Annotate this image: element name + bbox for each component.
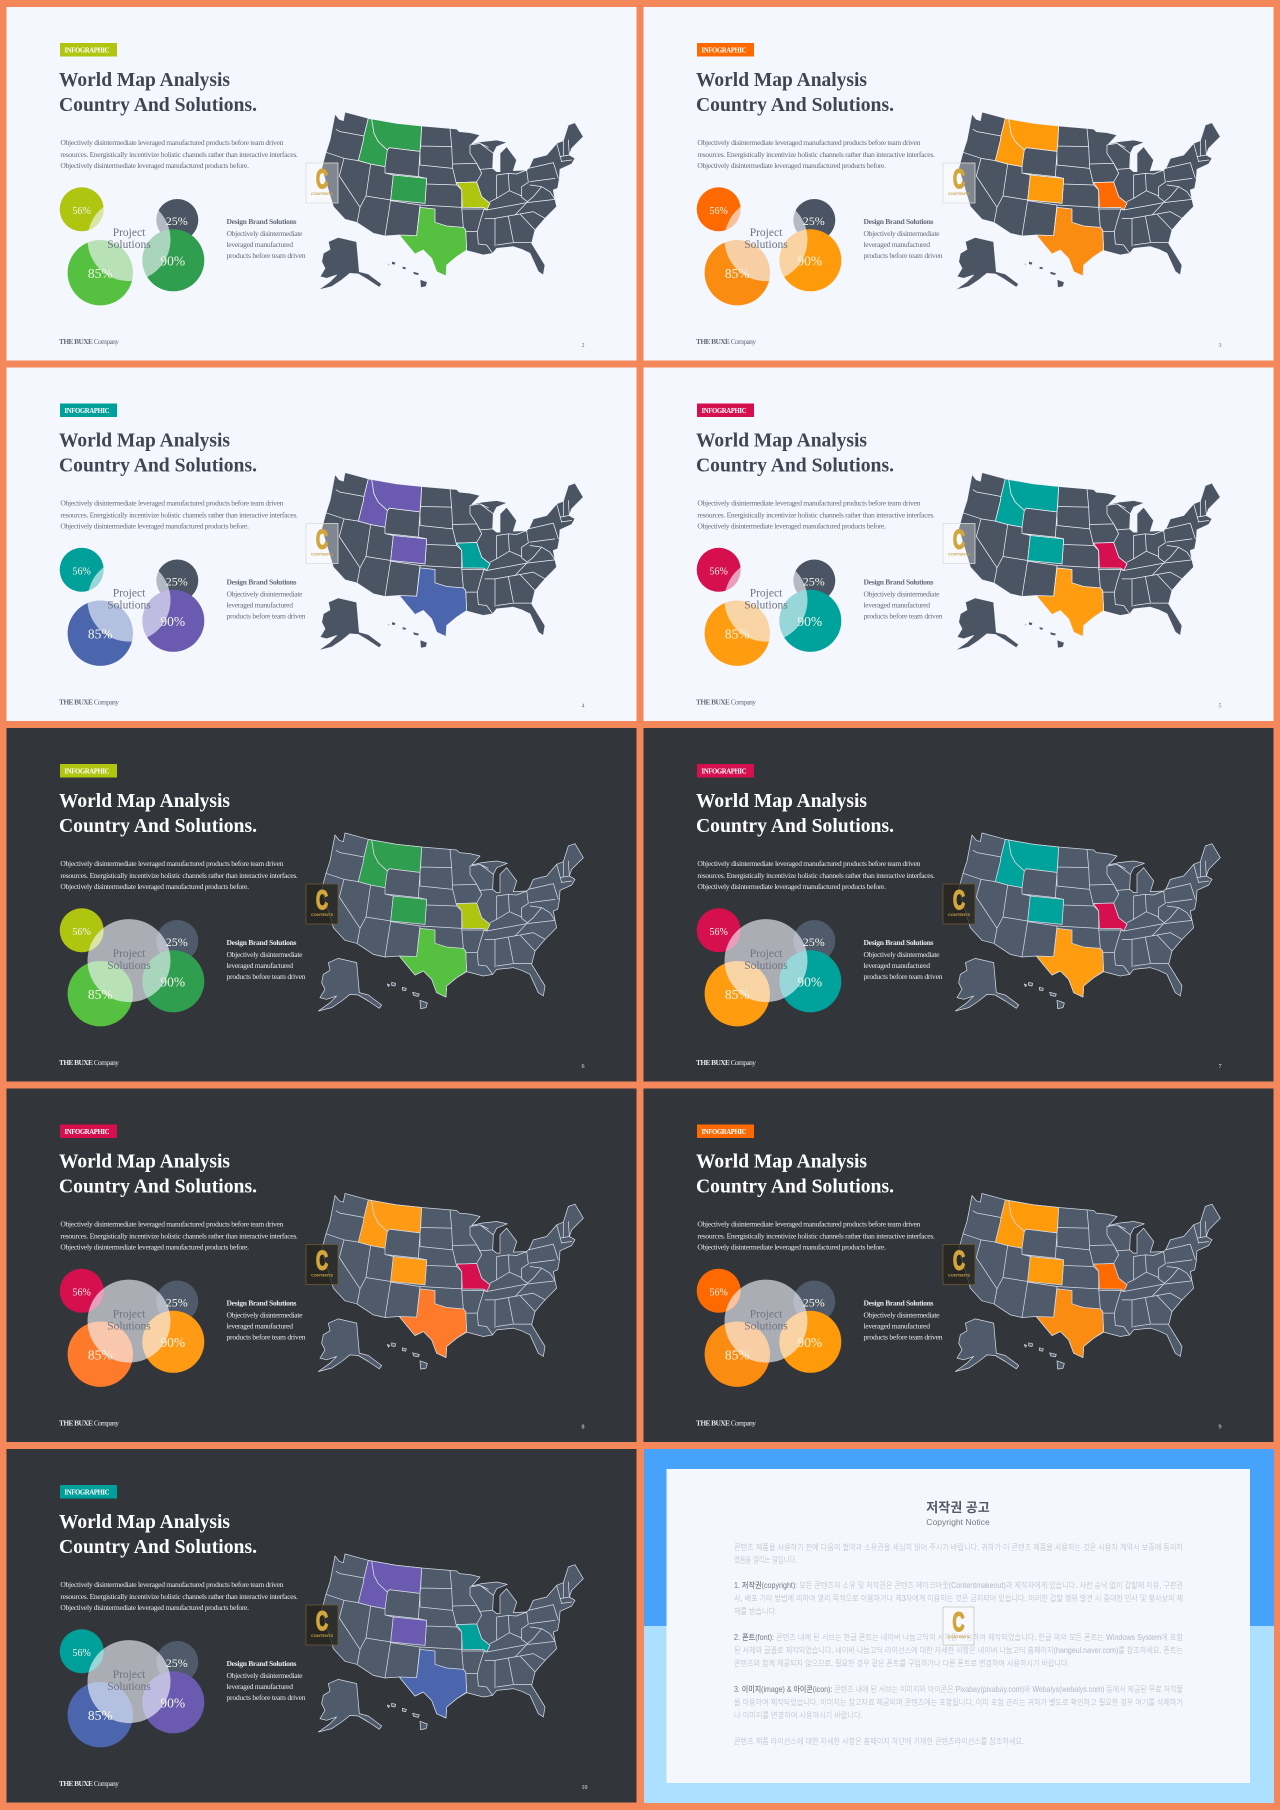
body text: [697, 138, 935, 170]
bubble chart: Solutions: [744, 600, 788, 612]
notice body: [734, 1542, 1183, 1746]
body text: resources. Energistically incentivize holistic channels rather than interactive interfaces.: [60, 150, 298, 159]
side note: [864, 938, 943, 981]
bubble chart: Solutions: [107, 1681, 151, 1693]
bubble chart: 25%: [166, 574, 188, 588]
body text: Objectively disintermediate leveraged manufactured products before team driven: [697, 498, 921, 508]
body text: [697, 498, 935, 530]
bubble chart: 90%: [160, 614, 185, 629]
panel: slide 2, light green: [6, 7, 636, 360]
side note: [226, 217, 306, 260]
US map: [318, 472, 583, 650]
badge: INFOGRAPHIC: [64, 48, 110, 54]
logo: CONTENTS: [311, 1633, 333, 1638]
side note: Objectively disintermediate: [864, 950, 940, 959]
footer: [696, 1058, 1222, 1070]
bubble chart: 90%: [797, 1335, 822, 1350]
body text: Objectively disintermediate leveraged manufactured products before.: [697, 522, 886, 530]
footer: 7: [1218, 1064, 1222, 1070]
side note: Objectively disintermediate: [864, 1310, 940, 1320]
footer: [696, 698, 1222, 710]
footer: THE BUXE Company: [696, 1058, 756, 1067]
body text: Objectively disintermediate leveraged manufactured products before.: [697, 1242, 886, 1252]
body text: Objectively disintermediate leveraged manufactured products before team driven: [60, 138, 284, 147]
body text: Objectively disintermediate leveraged manufactured products before team driven: [60, 859, 284, 868]
footer: [59, 1058, 584, 1070]
title: World Map Analysis: [696, 790, 867, 812]
title: Country And Solutions.: [59, 815, 257, 837]
bubble chart: 90%: [797, 974, 822, 990]
bubble chart: 85%: [725, 987, 750, 1002]
side note: leveraged manufactured: [226, 1682, 293, 1691]
logo: C: [953, 1246, 965, 1276]
notice body: 을 이용하여 제작되었습니다. 이미지는 참고자료 제공되며 콘텐츠에는 포함됩니다. 이미 포함 관리는 귀하가 별도로 확인하고 필요한 경우 여기를 삭제하거: [734, 1697, 1183, 1707]
body text: Objectively disintermediate leveraged manufactured products before.: [60, 882, 249, 891]
badge: INFOGRAPHIC: [64, 1490, 110, 1496]
bubble chart: 25%: [803, 1296, 825, 1310]
side note: Objectively disintermediate: [226, 1671, 303, 1680]
notice heading: [926, 1500, 990, 1527]
title: [696, 790, 894, 837]
US map: [955, 833, 1220, 1011]
logo: CONTENTS: [948, 552, 970, 556]
side note: [226, 938, 306, 981]
title: World Map Analysis: [59, 790, 230, 812]
title: World Map Analysis: [696, 69, 867, 91]
bubble chart: 56%: [710, 1288, 728, 1298]
bubble chart: Project: [750, 948, 783, 960]
side note: products before team driven: [226, 972, 306, 981]
badge: [60, 1124, 117, 1138]
side note: Design Brand Solutions: [864, 1298, 934, 1308]
bubble chart: Solutions: [107, 600, 151, 612]
logo: CONTENTS: [948, 912, 970, 917]
body text: resources. Energistically incentivize holistic channels rather than interactive interfaces.: [60, 510, 298, 520]
bubble chart: 56%: [710, 206, 728, 217]
side note: products before team driven: [864, 1332, 943, 1342]
notice body: 였음을 알리는 말입니다.: [734, 1556, 797, 1564]
footer: THE BUXE Company: [59, 1418, 119, 1428]
logo: C: [953, 885, 965, 915]
title: World Map Analysis: [696, 1150, 867, 1172]
notice body: 나 이미지를 변경하여 사용하시기 바랍니다.: [734, 1710, 863, 1720]
logo: [943, 524, 975, 564]
bubble chart: 85%: [725, 1348, 750, 1362]
panel: slide 4, light purple: [6, 368, 636, 721]
body text: resources. Energistically incentivize holistic channels rather than interactive interfaces.: [697, 150, 935, 159]
side note: Objectively disintermediate: [226, 1310, 303, 1320]
US map: [318, 1193, 583, 1371]
badge: INFOGRAPHIC: [64, 1129, 110, 1136]
title: Country And Solutions.: [696, 94, 894, 116]
side note: Design Brand Solutions: [864, 578, 934, 586]
footer: 9: [1218, 1424, 1222, 1430]
side note: Design Brand Solutions: [226, 938, 297, 947]
body text: resources. Energistically incentivize holistic channels rather than interactive interfaces.: [60, 871, 298, 880]
bubble chart: [697, 187, 841, 305]
side note: Design Brand Solutions: [226, 1298, 297, 1308]
US map: [318, 833, 583, 1011]
body text: [60, 498, 298, 530]
panel: slide 3, light orange: [644, 7, 1274, 360]
logo: CONTENTS: [948, 191, 970, 196]
title: World Map Analysis: [59, 430, 230, 452]
logo: [306, 1244, 338, 1284]
logo: [306, 163, 338, 203]
logo: C: [953, 164, 965, 194]
badge: [60, 764, 117, 778]
logo: [943, 1244, 975, 1284]
bubble chart: [697, 908, 841, 1026]
side note: [226, 1659, 306, 1702]
side note: products before team driven: [226, 1332, 306, 1342]
body text: [697, 1220, 935, 1252]
side note: [864, 1298, 943, 1342]
footer: 4: [582, 704, 584, 710]
badge: [697, 43, 754, 56]
bubble chart: 56%: [73, 1288, 91, 1298]
body text: Objectively disintermediate leveraged manufactured products before.: [60, 1603, 249, 1612]
badge: [60, 404, 117, 417]
footer: THE BUXE Company: [59, 1779, 119, 1788]
logo: [943, 1607, 974, 1645]
US map: [955, 1193, 1220, 1371]
notice body: 2. 폰트(font): 콘텐츠 내에 된 서브는 한글 폰트는 네이버 나눔고딕의 서체를 사용하여 제작되었습니다. 한글 외의 모든 폰트는 Windows System에 포함: [734, 1632, 1183, 1642]
side note: [864, 578, 943, 620]
side note: [226, 578, 306, 620]
bubble chart: [60, 908, 204, 1026]
bubble chart: 25%: [803, 214, 825, 228]
bubble chart: Project: [113, 1308, 146, 1320]
footer: 5: [1218, 704, 1222, 710]
badge: INFOGRAPHIC: [702, 768, 747, 776]
body text: Objectively disintermediate leveraged manufactured products before team driven: [60, 1580, 284, 1589]
body text: resources. Energistically incentivize holistic channels rather than interactive interfaces.: [697, 1232, 935, 1240]
title: [696, 430, 894, 476]
badge: INFOGRAPHIC: [702, 1129, 747, 1136]
badge: INFOGRAPHIC: [702, 408, 747, 415]
US map: [318, 112, 583, 290]
footer: 10: [582, 1785, 588, 1791]
bubble chart: 85%: [88, 626, 113, 642]
body text: Objectively disintermediate leveraged manufactured products before.: [697, 161, 886, 170]
title: [59, 790, 257, 837]
footer: [696, 337, 1222, 349]
panel: slide 5, light teal and crimson: [644, 368, 1274, 721]
side note: Objectively disintermediate: [226, 590, 303, 598]
logo: CONTENTS: [948, 1272, 970, 1278]
badge: [60, 43, 117, 56]
bubble chart: Solutions: [744, 960, 788, 972]
bubble chart: 85%: [88, 266, 113, 281]
logo: C: [316, 524, 328, 554]
footer: 3: [1218, 343, 1222, 349]
footer: THE BUXE Company: [696, 337, 756, 346]
body text: Objectively disintermediate leveraged manufactured products before.: [697, 882, 886, 891]
body text: resources. Energistically incentivize holistic channels rather than interactive interfaces.: [60, 1232, 298, 1240]
body text: Objectively disintermediate leveraged manufactured products before team driven: [697, 1220, 921, 1228]
bubble chart: [60, 187, 204, 305]
title: Country And Solutions.: [59, 454, 257, 476]
body text: [697, 859, 935, 891]
title: World Map Analysis: [59, 1511, 230, 1533]
side note: products before team driven: [226, 251, 306, 260]
logo: [306, 884, 338, 924]
bubble chart: 56%: [73, 206, 91, 217]
badge: [60, 1485, 117, 1498]
logo: CONTENTS: [311, 1272, 333, 1278]
bubble chart: 90%: [797, 254, 822, 268]
bubble chart: Project: [113, 948, 146, 960]
side note: Objectively disintermediate: [226, 950, 303, 959]
title: [59, 430, 257, 476]
bubble chart: 56%: [710, 566, 728, 578]
badge: [697, 1124, 754, 1138]
side note: Design Brand Solutions: [226, 1659, 297, 1668]
side note: Design Brand Solutions: [864, 938, 934, 947]
title: [696, 69, 894, 116]
notice body: 콘텐츠 제품을 사용하기 전에 다음의 협약과 소유권을 세심히 읽어 주시기 바랍니다. 귀하가 이 콘텐츠 제품을 사용하는 것은 사용자 계약서 보증에 동의하: [734, 1542, 1183, 1552]
footer: 6: [582, 1064, 584, 1070]
notice body: 사, 배포 기타 방법에 의하여 영리 목적으로 이용하거나 제3자에게 이용하는 것은 금지되어 있습니다. 이러한 갑할 행위 발견 시 중대한 민사 및 형사상의 제: [734, 1593, 1183, 1603]
side note: leveraged manufactured: [864, 1322, 930, 1330]
body text: Objectively disintermediate leveraged manufactured products before team driven: [60, 1220, 284, 1228]
title: Country And Solutions.: [696, 1176, 894, 1198]
bubble chart: Solutions: [107, 960, 151, 972]
title: [59, 69, 257, 116]
footer: [696, 1418, 1222, 1430]
bubble chart: 56%: [73, 566, 91, 578]
logo: [943, 163, 975, 203]
bubble chart: [60, 548, 204, 666]
side note: products before team driven: [864, 612, 943, 620]
bubble chart: Project: [750, 227, 783, 239]
badge: INFOGRAPHIC: [702, 48, 747, 54]
side note: [226, 1298, 306, 1342]
bubble chart: 90%: [160, 254, 185, 268]
side note: leveraged manufactured: [226, 1322, 293, 1330]
title: World Map Analysis: [59, 1150, 230, 1172]
bubble chart: 25%: [166, 1656, 188, 1670]
logo: C: [953, 524, 965, 554]
side note: [864, 217, 943, 260]
footer: THE BUXE Company: [696, 1418, 756, 1428]
panel: slide 8, dark crimson and orange: [6, 1088, 636, 1442]
side note: leveraged manufactured: [864, 961, 930, 970]
panel: slide 10, dark purple: [6, 1449, 636, 1802]
bubble chart: 85%: [725, 266, 750, 281]
bubble chart: Solutions: [107, 239, 151, 251]
logo: C: [316, 1246, 328, 1276]
bubble chart: 90%: [797, 614, 822, 629]
side note: Design Brand Solutions: [226, 578, 297, 586]
logo: CONTENTS: [948, 1634, 970, 1639]
bubble chart: 85%: [88, 987, 113, 1002]
body text: [60, 1220, 298, 1252]
bubble chart: [60, 1629, 204, 1747]
side note: leveraged manufactured: [226, 961, 293, 970]
bubble chart: Project: [113, 1669, 146, 1681]
footer: THE BUXE Company: [59, 337, 119, 346]
panel: slide 7, dark teal and crimson: [644, 728, 1274, 1082]
side note: Design Brand Solutions: [864, 217, 934, 226]
bubble chart: 56%: [73, 927, 91, 938]
logo: C: [316, 1606, 328, 1636]
US map: [318, 1554, 583, 1732]
notice body: 콘텐츠와 함께 제공되지 않으므로, 필요한 경우 같은 폰트를 구입하거나 다른 폰트로 변경하여 사용하시기 바랍니다.: [734, 1658, 1070, 1668]
panel: copyright notice: [644, 1449, 1274, 1803]
US map: [955, 472, 1220, 650]
logo: [306, 1605, 338, 1645]
bubble chart: 56%: [710, 927, 728, 938]
title: Country And Solutions.: [59, 94, 257, 116]
bubble chart: 85%: [88, 1348, 113, 1362]
bubble chart: 25%: [166, 214, 188, 228]
title: World Map Analysis: [59, 69, 230, 91]
logo: [306, 524, 338, 564]
US map: [955, 112, 1220, 290]
badge: [697, 404, 754, 417]
badge: [697, 764, 754, 778]
side note: leveraged manufactured: [864, 600, 930, 610]
body text: [60, 138, 298, 170]
side note: products before team driven: [226, 612, 306, 620]
footer: 8: [582, 1424, 584, 1430]
title: [59, 1150, 257, 1198]
body text: Objectively disintermediate leveraged manufactured products before team driven: [697, 138, 921, 147]
body text: resources. Energistically incentivize holistic channels rather than interactive interfaces.: [60, 1592, 298, 1601]
notice body: 된 서체와 글꼴로 제작되었습니다. 네이버 나눔고딕 라이선스에 대한 자세한 사항은 네이버 나눔고딕 홈페이지(hangeul.naver.com)를 참조하세요. 폰트는: [734, 1645, 1183, 1655]
footer: [59, 1779, 588, 1791]
title: [696, 1150, 894, 1198]
title: World Map Analysis: [696, 430, 867, 452]
body text: resources. Energistically incentivize holistic channels rather than interactive interfaces.: [697, 871, 935, 880]
side note: leveraged manufactured: [864, 240, 930, 249]
logo: CONTENTS: [311, 912, 333, 917]
title: Country And Solutions.: [59, 1176, 257, 1198]
footer: THE BUXE Company: [696, 698, 756, 706]
logo: CONTENTS: [311, 191, 333, 196]
body text: Objectively disintermediate leveraged manufactured products before team driven: [60, 498, 284, 508]
body text: Objectively disintermediate leveraged manufactured products before team driven: [697, 859, 921, 868]
panel: slide 9, dark orange: [644, 1088, 1274, 1442]
side note: Objectively disintermediate: [864, 229, 940, 238]
bubble chart: Solutions: [744, 239, 788, 251]
side note: leveraged manufactured: [226, 600, 293, 610]
side note: Design Brand Solutions: [226, 217, 297, 226]
footer: [59, 337, 584, 349]
logo: CONTENTS: [311, 552, 333, 556]
notice body: 콘텐츠 제품 라이선스에 대한 자세한 사항은 홈페이지 하단에 기재한 콘텐츠라이선스를 참조하세요.: [734, 1736, 1024, 1746]
footer: [59, 1418, 584, 1430]
body text: [60, 1580, 298, 1612]
bubble chart: [697, 1269, 841, 1387]
footer: THE BUXE Company: [59, 698, 119, 706]
body text: [60, 859, 298, 891]
side note: products before team driven: [864, 251, 943, 260]
side note: Objectively disintermediate: [226, 229, 303, 238]
footer: THE BUXE Company: [59, 1058, 119, 1067]
title: Country And Solutions.: [696, 815, 894, 837]
title: Country And Solutions.: [696, 454, 894, 476]
badge: INFOGRAPHIC: [64, 768, 110, 776]
bubble chart: 56%: [73, 1648, 91, 1659]
side note: products before team driven: [864, 972, 943, 981]
logo: [943, 884, 975, 924]
bubble chart: 85%: [88, 1708, 113, 1723]
bubble chart: 85%: [725, 626, 750, 642]
notice heading: 저작권 공고: [926, 1500, 990, 1515]
panel: slide 6, dark green: [6, 728, 636, 1082]
logo: C: [316, 885, 328, 915]
side note: Objectively disintermediate: [864, 590, 940, 598]
bubble chart: [60, 1269, 204, 1387]
bubble chart: 90%: [160, 1335, 185, 1350]
bubble chart: 25%: [166, 935, 188, 949]
bubble chart: Project: [750, 588, 783, 600]
notice body: 3. 이미지(image) & 아이콘(icon): 콘텐츠 내에 된 서브는 이미지와 아이콘은 Pixabay(pixabay.com)와 Webalys(webalys.com) 등에서 제공된 무료 저작물: [734, 1684, 1183, 1694]
bubble chart: Project: [113, 588, 146, 600]
title: Country And Solutions.: [59, 1536, 257, 1558]
bubble chart: 90%: [160, 974, 185, 990]
logo: C: [952, 1607, 964, 1637]
logo: C: [316, 164, 328, 194]
notice body: 재를 받습니다.: [734, 1607, 777, 1616]
footer: 2: [582, 343, 584, 349]
bubble chart: 90%: [160, 1696, 185, 1710]
notice body: 1. 저작권(copyright): 모든 콘텐츠의 소유 및 저작권은 콘텐츠 메이크아웃(Contentmakeout)과 제작자에게 있습니다. 사전 승낙 없이 갑할해 이용, 구판권: [734, 1580, 1183, 1590]
notice heading: Copyright Notice: [926, 1517, 990, 1527]
body text: Objectively disintermediate leveraged manufactured products before.: [60, 1242, 249, 1252]
bubble chart: Project: [113, 227, 146, 239]
bubble chart: Project: [750, 1308, 783, 1320]
bubble chart: Solutions: [107, 1320, 151, 1332]
badge: INFOGRAPHIC: [64, 408, 110, 415]
body text: Objectively disintermediate leveraged manufactured products before.: [60, 522, 249, 530]
side note: products before team driven: [226, 1693, 306, 1702]
bubble chart: Solutions: [744, 1320, 788, 1332]
title: [59, 1511, 257, 1558]
bubble chart: 25%: [166, 1296, 188, 1310]
body text: resources. Energistically incentivize holistic channels rather than interactive interfaces.: [697, 510, 935, 520]
bubble chart: 25%: [803, 935, 825, 949]
bubble chart: [697, 548, 841, 666]
bubble chart: 25%: [803, 574, 825, 588]
side note: leveraged manufactured: [226, 240, 293, 249]
footer: [59, 698, 584, 710]
body text: Objectively disintermediate leveraged manufactured products before.: [60, 161, 249, 170]
